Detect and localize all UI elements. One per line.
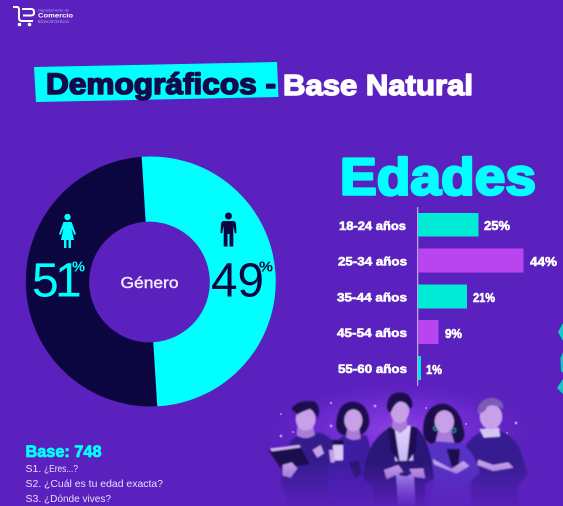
question S3: ¿Dónde vives? [44, 493, 111, 505]
row: 35-44 años: 21% [473, 291, 495, 305]
person 5: man with sweater [463, 398, 528, 506]
person 1: man with book [268, 401, 340, 506]
logo text: Comercio [38, 12, 73, 20]
question S3: S3. [26, 493, 41, 505]
row: 55-60 años: 1% [426, 363, 442, 377]
donut center label: Género [120, 275, 179, 292]
row: 25-34 años: 25-34 años [338, 254, 407, 268]
heading: Edades: Edades [340, 148, 536, 206]
label: 51%: 51 [32, 254, 82, 308]
label: 49%: % [259, 258, 273, 276]
title [34, 62, 473, 102]
donut segment: hombre 49% [142, 156, 276, 406]
icon: man [220, 212, 236, 246]
row: 35-44 años: 35-44 años [337, 290, 407, 304]
label: 49%: 49 [211, 254, 264, 308]
row: 25-34 años [338, 248, 557, 272]
illustration glow [260, 380, 540, 480]
illustration: group of five people [260, 380, 550, 506]
row: 45-54 años: 45-54 años [337, 326, 407, 340]
logo text [38, 8, 73, 25]
person 3: man with tablet [363, 392, 434, 506]
row: 18-24 años: 18-24 años [339, 219, 406, 233]
title text: Demográficos: Demográficos - [46, 68, 276, 101]
row: 55-60 años: 55-60 años [338, 362, 407, 376]
question S2: S2. [26, 478, 41, 490]
title text: Base Natural: Base Natural [283, 70, 473, 102]
row: 18-24 años [339, 213, 510, 236]
question S2: ¿Cuál es tu edad exacta? [44, 478, 163, 490]
row: 18-24 años: 25% [484, 219, 510, 233]
question S1: S1. [26, 463, 41, 475]
donut segment: mujer 51% [26, 157, 157, 406]
base and survey questions [26, 442, 163, 505]
person 4: woman crossed arms [423, 403, 480, 506]
sparkles [280, 402, 518, 438]
row: 55-60 años [338, 356, 442, 380]
donut chart: género [26, 156, 276, 406]
bar chart: edades [337, 207, 557, 386]
base count: Base: 748 [26, 442, 102, 461]
row: 35-44 años [337, 284, 495, 308]
label: 51%: % [72, 258, 85, 276]
icon: shopping cart [13, 7, 34, 25]
logo text: Electrónico [38, 19, 69, 25]
illustration bottom fade [270, 462, 550, 506]
row: 25-34 años: 44% [530, 255, 557, 269]
row: 45-54 años: 9% [445, 327, 462, 341]
question S1 [26, 463, 78, 475]
icon: woman [59, 214, 76, 248]
person 2: woman with coffee [328, 402, 377, 506]
logo text: Departamento de [38, 8, 69, 12]
row: 45-54 años [337, 320, 462, 344]
title highlight banner [34, 62, 278, 102]
logo: Comercio Electrónico [13, 7, 73, 25]
decorative edge shapes [557, 323, 563, 394]
chart axis [417, 207, 419, 386]
question S1: ¿Eres...? [44, 463, 78, 475]
